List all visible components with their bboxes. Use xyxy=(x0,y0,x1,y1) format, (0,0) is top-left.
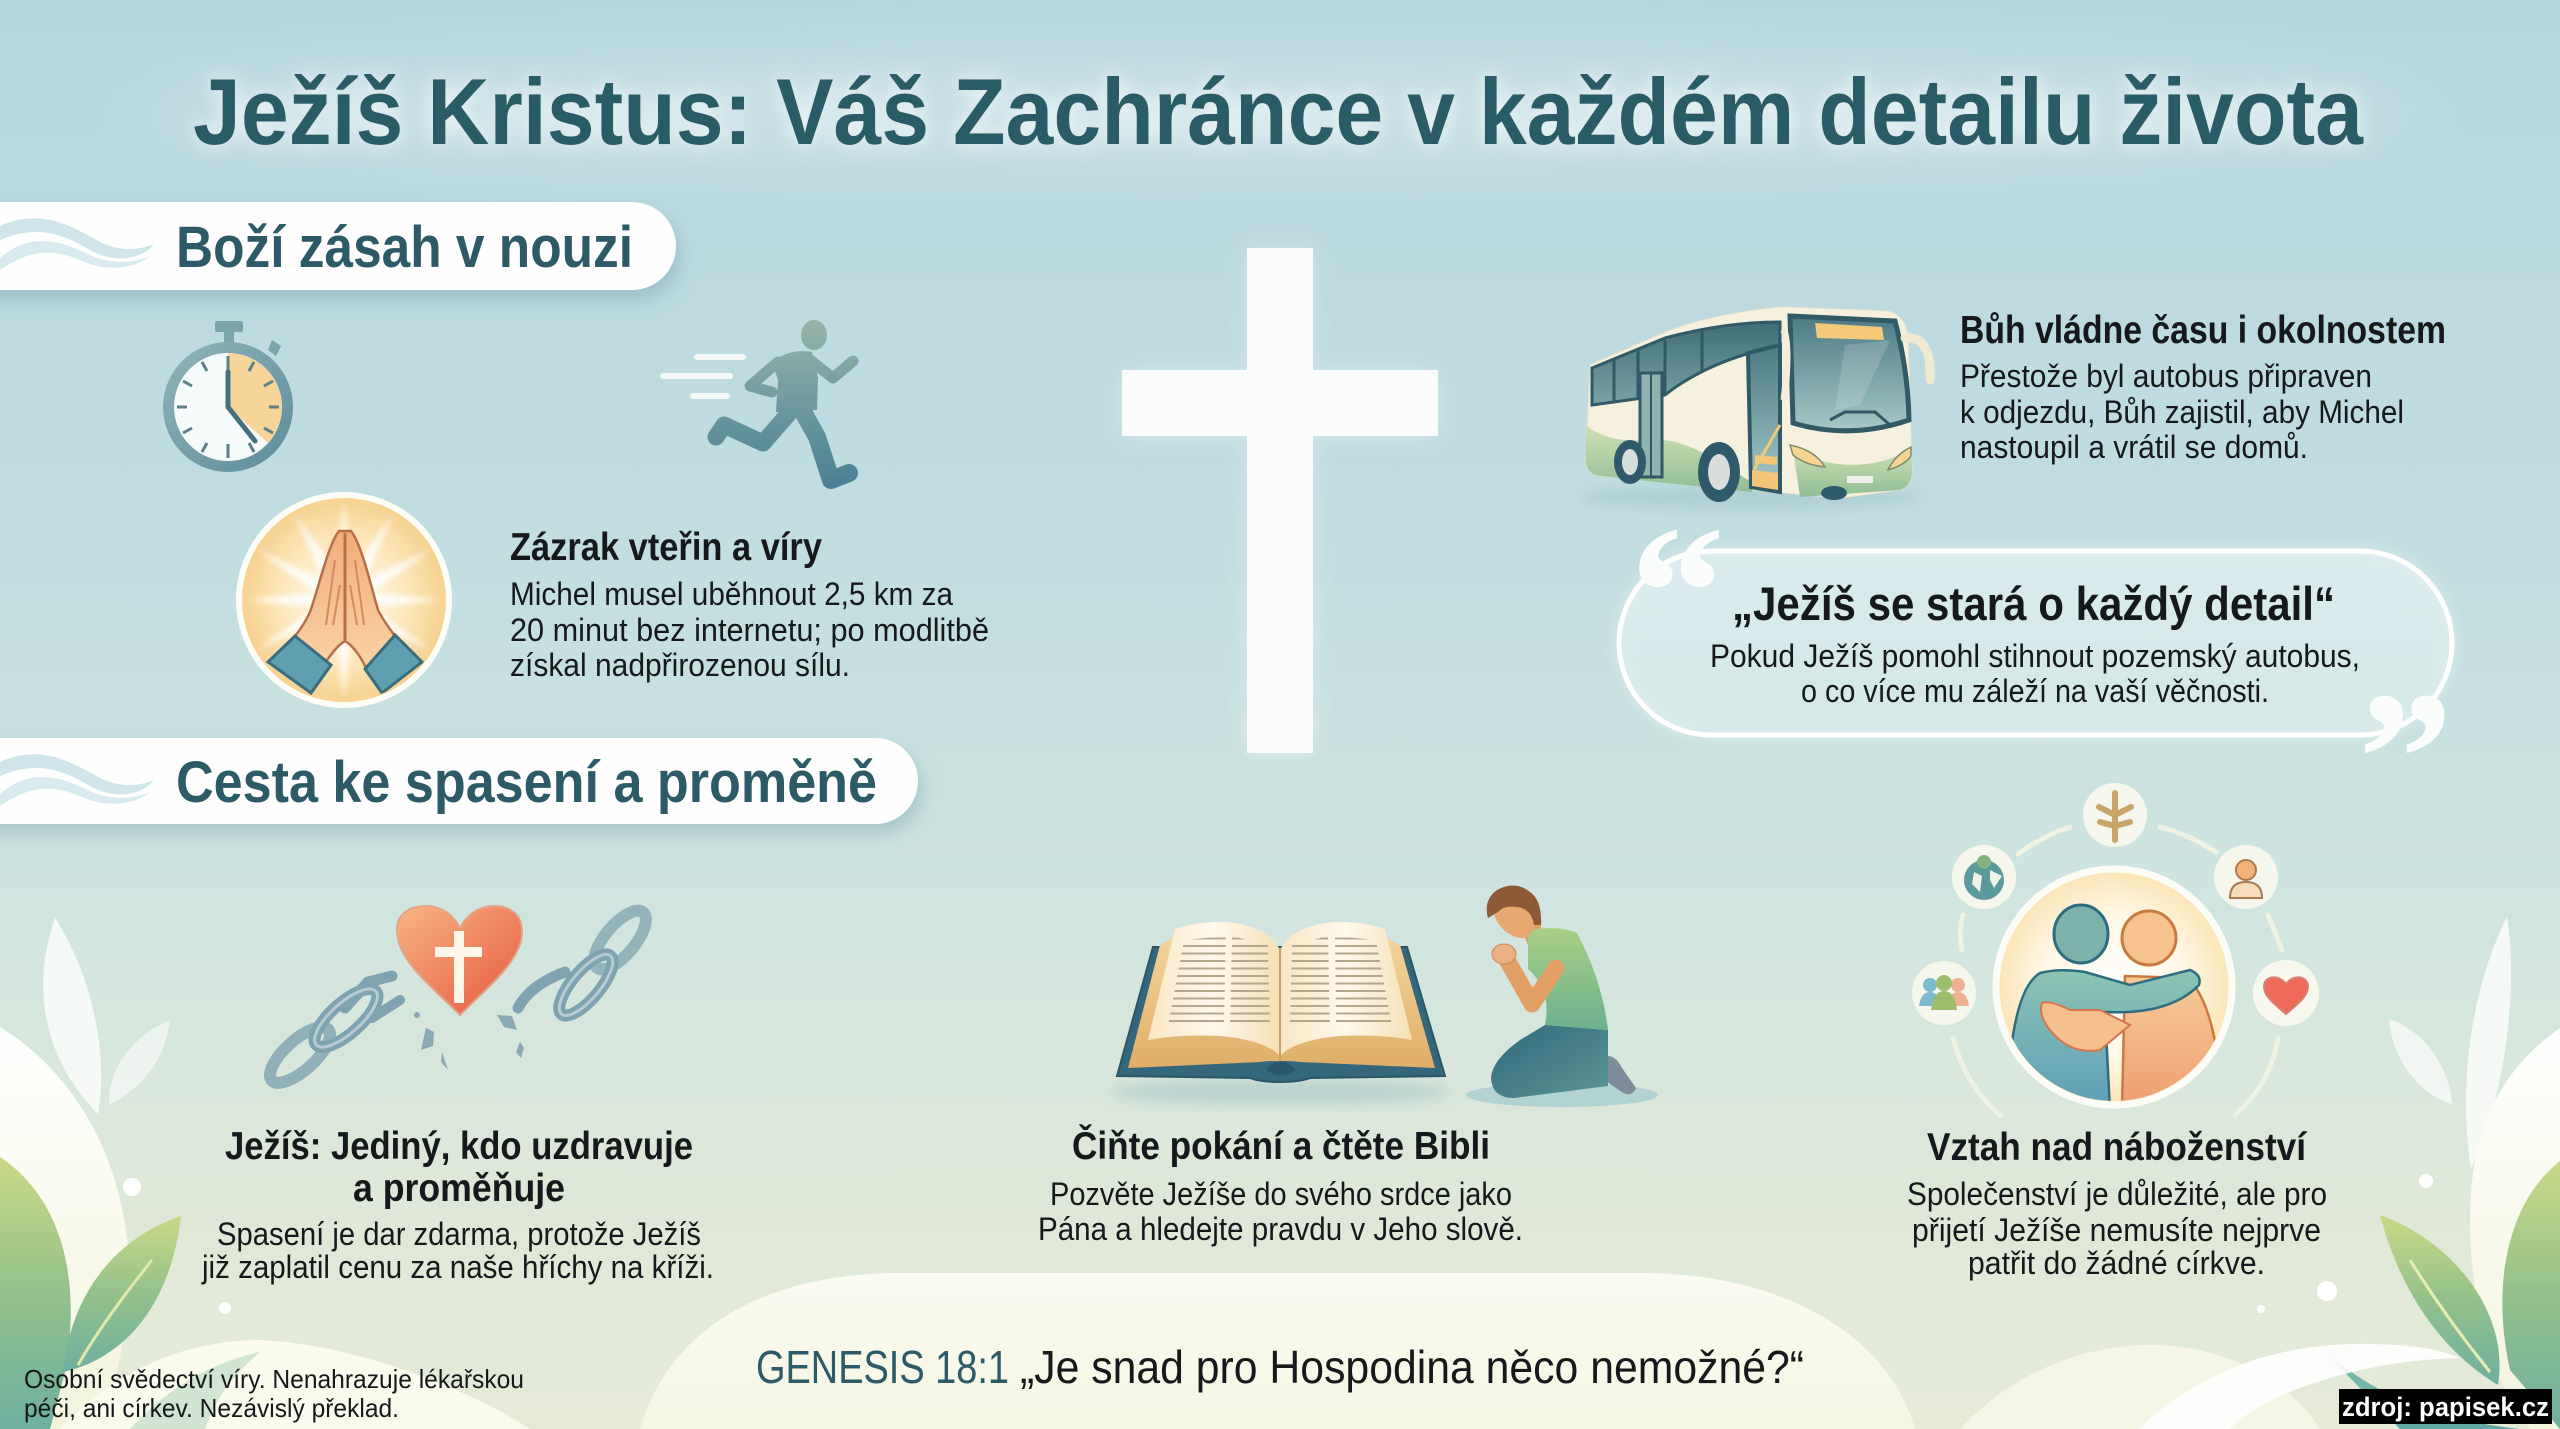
text block: Vztah nad náboženství: Vztah nad náboženství xyxy=(1927,1126,2307,1169)
icon: heart with cross and broken chains xyxy=(262,903,655,1092)
callout: quote: o co více mu záleží na vaší věčnosti. xyxy=(1801,673,2269,709)
verse: Genesis 18:1: GENESIS 18:1 xyxy=(756,1341,1009,1393)
opening quote mark: “ xyxy=(1630,488,1725,698)
icon: stopwatch xyxy=(163,321,293,472)
small circle: person xyxy=(2214,845,2278,909)
text block: Bůh vládne času i okolnostem: Přestože byl autobus připraven xyxy=(1960,358,2372,394)
icon: community circle xyxy=(1912,783,2319,1115)
section heading: Cesta ke spasení a proměně: Cesta ke spasení a proměně xyxy=(176,750,877,815)
text block: Zázrak vteřin a víry: Michel musel uběhnout 2,5 km za xyxy=(510,576,953,612)
text block: Vztah nad náboženství: Společenství je důležité, ale pro xyxy=(1907,1176,2327,1212)
text block: Čiňte pokání: Pozvěte Ježíše do svého srdce jako xyxy=(1050,1176,1512,1212)
floating dots left xyxy=(123,1178,231,1314)
small circle: plant xyxy=(2083,783,2147,847)
text block: Ježíš jediný: Spasení je dar zdarma, protože Ježíš xyxy=(217,1216,701,1252)
text block: Zázrak vteřin a víry: 20 minut bez internetu; po modlitbě xyxy=(510,612,989,648)
text block: Ježíš jediný: Ježíš: Jediný, kdo uzdravuje xyxy=(225,1125,693,1168)
text block: Vztah nad náboženství: patřit do žádné církve. xyxy=(1968,1245,2265,1281)
text block: Čiňte pokání: Pána a hledejte pravdu v Jeho slově. xyxy=(1038,1211,1523,1247)
bottom-right leaf decoration xyxy=(1960,917,2560,1429)
callout: quote xyxy=(1619,488,2453,864)
text block: Bůh vládne času i okolnostem: k odjezdu, Bůh zajistil, aby Michel xyxy=(1960,394,2404,430)
callout: quote: „Ježíš se stará o každý detail“ xyxy=(1732,577,2335,630)
text block: Bůh vládne času i okolnostem xyxy=(1960,309,2446,465)
icon: bus xyxy=(1580,307,1930,509)
icon: kneeling man praying xyxy=(1466,885,1658,1107)
disclaimer note xyxy=(24,1364,524,1423)
text block: Zázrak vteřin a víry: Zázrak vteřin a víry xyxy=(510,526,822,569)
title: Ježíš Kristus: Váš Zachránce v každém detailu života xyxy=(193,59,2364,164)
disclaimer note: Osobní svědectví víry. Nenahrazuje lékařskou xyxy=(24,1364,524,1394)
section heading: Boží zásah v nouzi: Boží zásah v nouzi xyxy=(176,215,633,280)
icon: running figure xyxy=(663,320,853,480)
central cross xyxy=(1122,248,1438,753)
disclaimer note: péči, ani církev. Nezávislý překlad. xyxy=(24,1393,399,1423)
verse: Genesis 18:1: „Je snad pro Hospodina něco nemožné?“ xyxy=(1020,1341,1804,1393)
text block: Čiňte pokání xyxy=(1038,1123,1523,1247)
section heading: Cesta ke spasení a proměně xyxy=(0,738,918,824)
text block: Vztah nad náboženství xyxy=(1907,1126,2327,1281)
text block: Bůh vládne času i okolnostem: Bůh vládne času i okolnostem xyxy=(1960,309,2446,352)
text block: Ježíš jediný xyxy=(201,1125,714,1285)
text block: Zázrak vteřin a víry xyxy=(510,526,989,683)
callout: quote: ” xyxy=(2358,654,2453,864)
text block: Ježíš jediný: již zaplatil cenu za naše hříchy na kříži. xyxy=(201,1249,714,1285)
small circle: heart xyxy=(2253,960,2319,1026)
source badge: zdroj: papisek.cz xyxy=(2342,1392,2549,1422)
small circle: group xyxy=(1912,961,1976,1025)
section heading: Boží zásah v nouzi xyxy=(0,202,676,290)
icon: praying hands medallion xyxy=(239,495,449,705)
floating dots right xyxy=(2257,1174,2433,1313)
text block: Bůh vládne času i okolnostem: nastoupil a vrátil se domů. xyxy=(1960,429,2308,465)
callout: quote: Pokud Ježíš pomohl stihnout pozemský autobus, xyxy=(1710,638,2360,674)
small circle: globe xyxy=(1952,845,2016,909)
bottom verse panel shape xyxy=(640,1273,1915,1429)
title glow xyxy=(130,50,2430,170)
text block: Zázrak vteřin a víry: získal nadpřirozenou sílu. xyxy=(510,647,850,683)
text block: Ježíš jediný: a proměňuje xyxy=(353,1167,565,1210)
bottom-left leaf decoration xyxy=(0,918,530,1429)
text block: Čiňte pokání: Čiňte pokání a čtěte Bibli xyxy=(1072,1123,1490,1168)
icon: open Bible xyxy=(1110,922,1450,1104)
text block: Vztah nad náboženství: přijetí Ježíše nemusíte nejprve xyxy=(1912,1212,2321,1248)
